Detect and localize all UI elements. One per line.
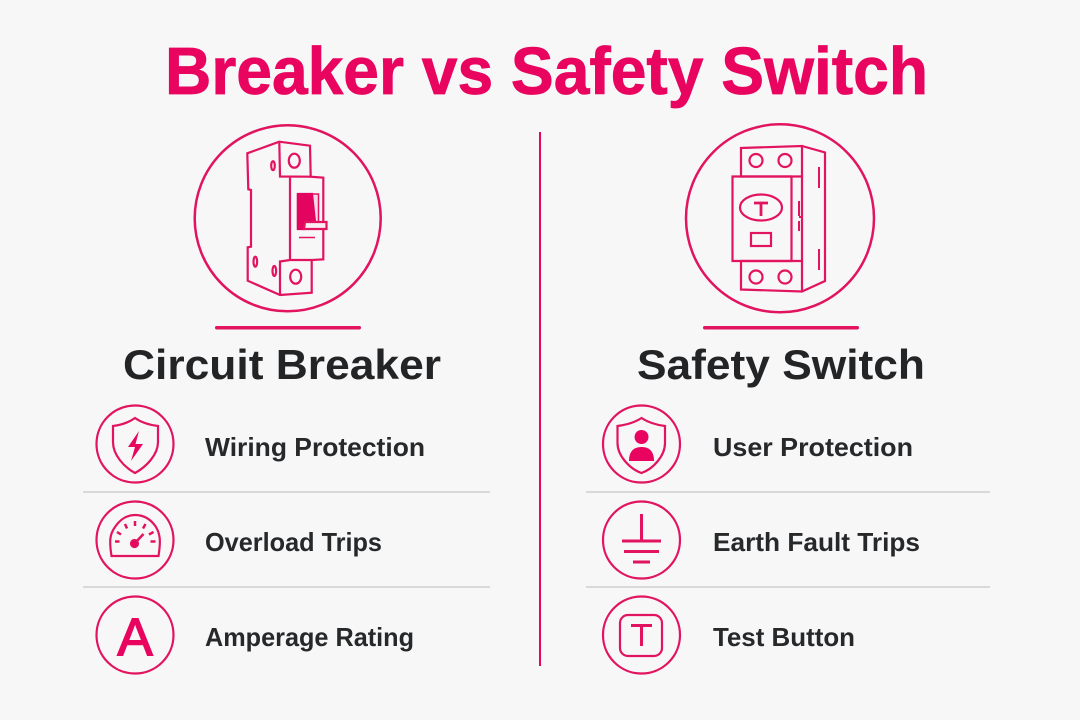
icon: letter A: A [117, 608, 153, 667]
heading: Safety Switch [637, 341, 925, 388]
title: Breaker vs Safety Switch [165, 34, 928, 109]
accent underline [215, 326, 361, 330]
panel: safety switch [586, 124, 990, 674]
label: User Protection [713, 432, 913, 462]
row: amperage rating [96, 596, 414, 674]
row: overload trips [96, 502, 382, 578]
panel: circuit breaker [83, 125, 490, 674]
icon: shield with person [603, 406, 680, 482]
label: Test Button [713, 622, 855, 652]
icon: circuit breaker device [195, 125, 381, 311]
icon: test button [603, 596, 680, 674]
heading: Circuit Breaker [123, 341, 441, 388]
row: user protection [603, 406, 913, 482]
row: earth fault trips [603, 502, 920, 578]
label: Overload Trips [205, 527, 382, 557]
icon: shield with bolt [96, 406, 174, 482]
label: Earth Fault Trips [713, 527, 920, 557]
row: wiring protection [96, 406, 425, 482]
label: Wiring Protection [205, 432, 425, 462]
accent underline [703, 326, 859, 330]
icon: earth symbol [603, 502, 680, 578]
row: test button [603, 596, 855, 674]
icon: safety switch device [686, 124, 874, 312]
label: Amperage Rating [205, 622, 414, 652]
icon: gauge [96, 502, 174, 578]
icon: letter A [96, 596, 174, 674]
